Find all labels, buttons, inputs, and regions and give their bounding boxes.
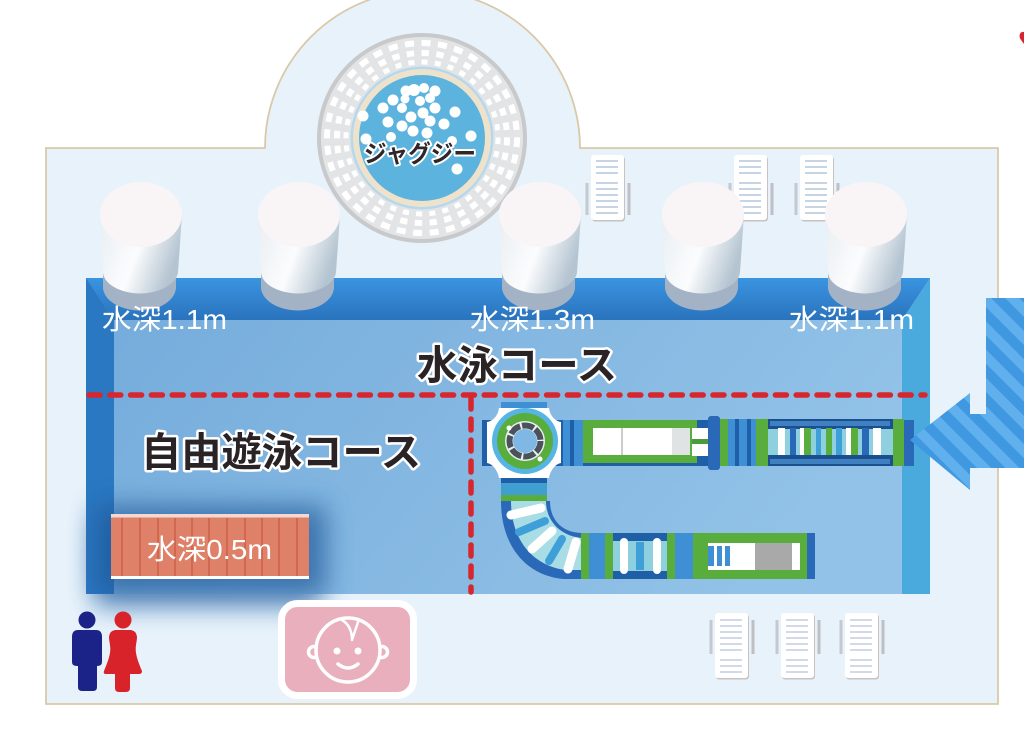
sun loungers bottom xyxy=(710,613,884,680)
shallow platform label: 水深0.5m xyxy=(147,534,272,565)
depth labels xyxy=(102,304,914,335)
swimming course heading: 水泳コース xyxy=(417,344,617,388)
depth labels: 水深1.1m xyxy=(102,304,227,335)
pool xyxy=(86,278,930,594)
hub platform xyxy=(487,402,561,478)
decorative heart xyxy=(1020,32,1024,44)
inflatable obstacle course xyxy=(482,402,914,579)
platform shadow xyxy=(96,506,326,596)
jacuzzi xyxy=(317,33,527,243)
shallow platform xyxy=(111,514,309,579)
top run xyxy=(482,416,914,470)
icon: woman xyxy=(104,612,142,692)
depth labels: 水深1.3m xyxy=(470,304,595,335)
entrance arrow xyxy=(910,298,1024,490)
jacuzzi bubbles xyxy=(358,83,476,174)
depth labels: 水深1.1m xyxy=(789,304,914,335)
jacuzzi label: ジャグジー xyxy=(364,140,476,168)
connector and curve xyxy=(501,478,583,579)
free swimming heading: 自由遊泳コース xyxy=(141,431,421,475)
red dashed dividers xyxy=(89,395,925,592)
pool glow under platform xyxy=(95,522,315,608)
sun loungers top xyxy=(586,155,840,222)
icon: baby room xyxy=(282,604,414,696)
icon: man xyxy=(72,612,102,691)
icon: restrooms xyxy=(72,612,142,692)
cylindrical pillars xyxy=(100,182,907,310)
lower run xyxy=(581,533,815,579)
